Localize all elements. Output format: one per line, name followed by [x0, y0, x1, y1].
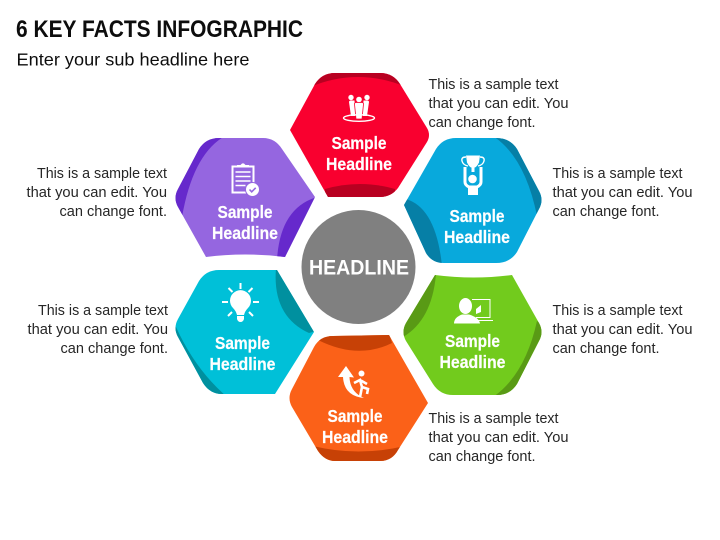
text block: top centre: that you can edit. You [428, 96, 568, 112]
center circle [302, 210, 416, 324]
text block: top centre: can change font. [428, 115, 536, 131]
heading: orange: Sample [328, 406, 383, 426]
text block: right upper: This is a sample text [552, 166, 682, 182]
text block: left lower: This is a sample text [38, 303, 168, 319]
text block: right upper: that you can edit. You [552, 185, 692, 201]
text block: left lower [28, 303, 168, 357]
panel: orange hexagon: Headline [322, 427, 388, 447]
panel: cyan hexagon [176, 270, 314, 394]
panel: green hexagon [404, 275, 542, 395]
panel: green hexagon: Headline [440, 352, 506, 372]
text block: left upper: This is a sample text [37, 166, 167, 182]
text block: bottom centre: can change font. [428, 449, 536, 465]
text block: left lower: that you can edit. You [28, 322, 168, 338]
text block: right upper: can change font. [552, 204, 660, 220]
text block: bottom centre: that you can edit. You [428, 430, 568, 446]
text block: right lower: This is a sample text [552, 303, 682, 319]
text block: top centre: This is a sample text [428, 77, 558, 93]
title: 6 KEY FACTS INFOGRAPHIC [16, 16, 303, 43]
text block: left upper [26, 166, 167, 220]
heading: blue: Sample [450, 206, 505, 226]
text block: right upper [552, 166, 692, 220]
icon: presenter [454, 298, 493, 324]
icon: clipboard [232, 163, 260, 196]
icon: light bulb [222, 283, 259, 322]
panel: red hexagon [290, 65, 429, 200]
text block: top centre [428, 77, 568, 131]
text block: left upper: that you can edit. You [26, 185, 167, 201]
heading: purple: Sample [218, 202, 273, 222]
panel: blue hexagon [404, 138, 542, 263]
panel: orange hexagon [290, 330, 428, 465]
panel: purple hexagon [176, 138, 315, 257]
text block: bottom centre: This is a sample text [428, 411, 558, 427]
icon: trophy [462, 156, 484, 195]
text block: right lower: that you can edit. You [552, 322, 692, 338]
text block: bottom centre [428, 411, 568, 465]
heading: cyan: Sample [215, 333, 270, 353]
icon: team [344, 95, 374, 121]
text block: left lower: can change font. [60, 341, 168, 357]
panel: red hexagon: Headline [326, 154, 392, 174]
heading: red: Sample [332, 133, 387, 153]
text block: right lower: can change font. [552, 341, 660, 357]
panel: purple hexagon: Headline [212, 223, 278, 243]
panel: blue hexagon: Headline [444, 227, 510, 247]
center circle: HEADLINE [309, 256, 409, 280]
sub headline: Enter your sub headline here [16, 50, 250, 70]
text block: left upper: can change font. [60, 204, 167, 220]
heading: green: Sample [445, 331, 500, 351]
text block: right lower [552, 303, 692, 357]
panel: cyan hexagon: Headline [210, 354, 276, 374]
icon: runner and arrow [338, 366, 368, 398]
